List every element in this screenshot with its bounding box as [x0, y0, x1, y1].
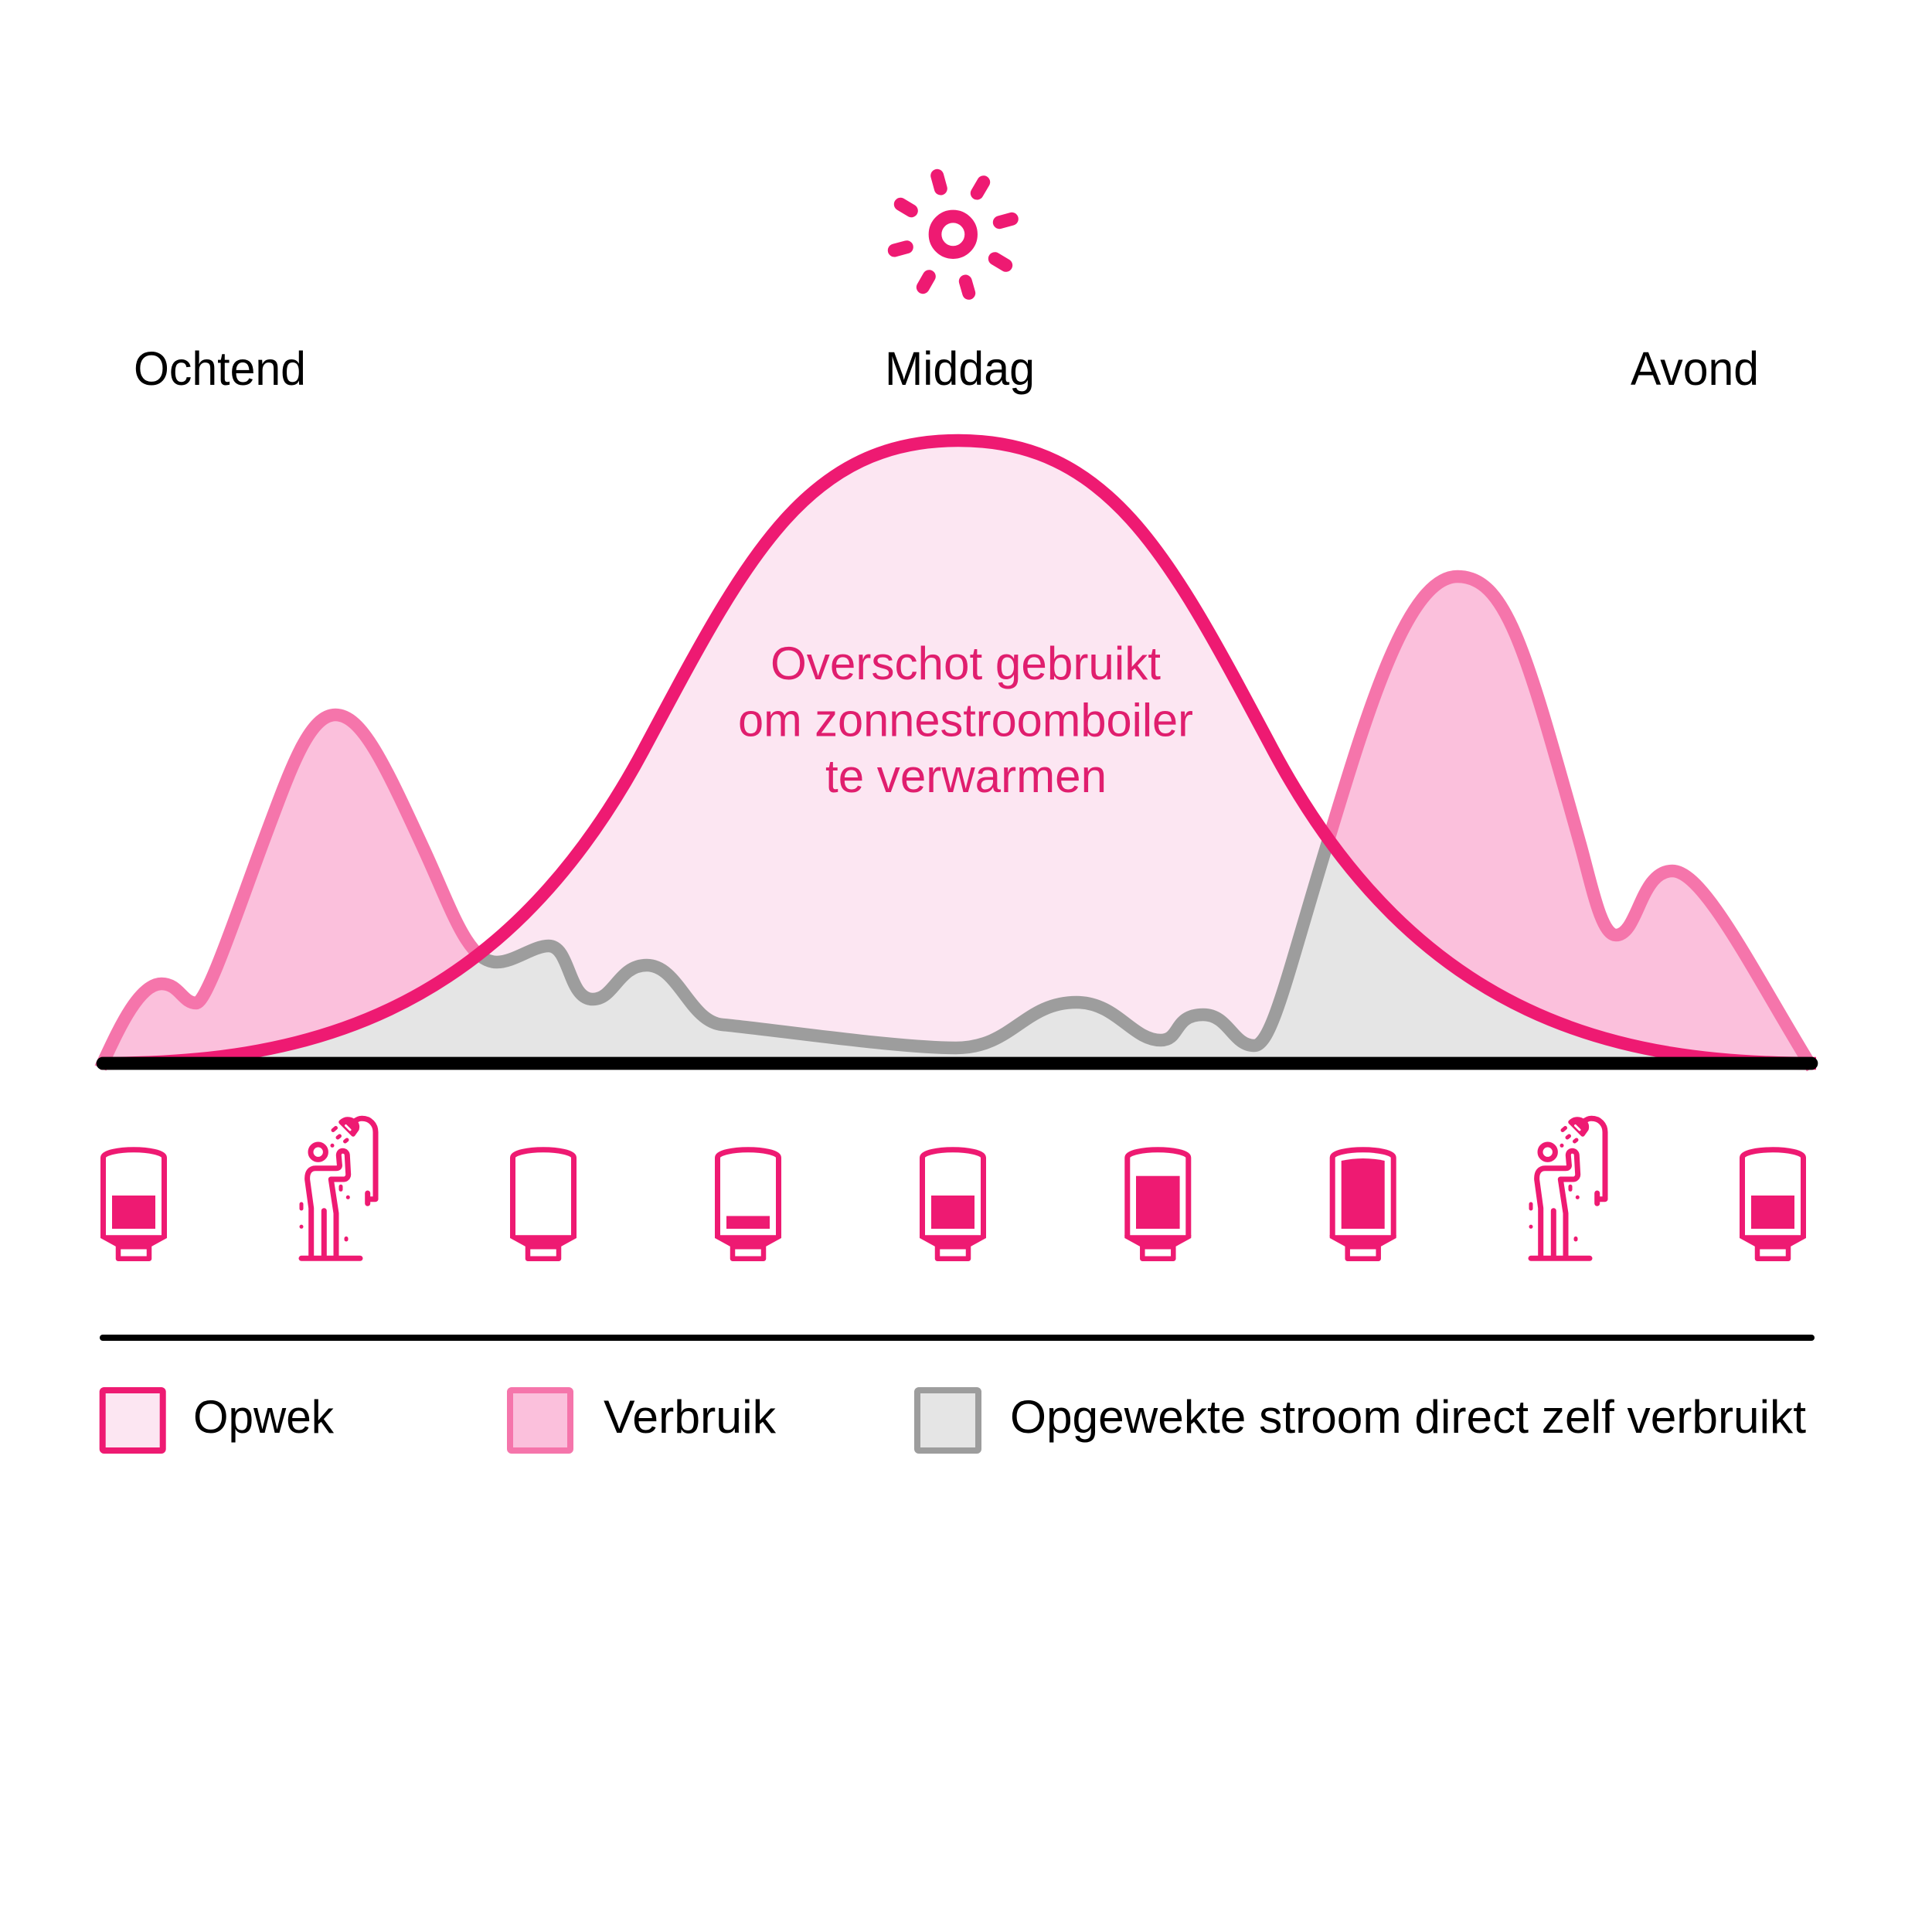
- icon: boiler full: [1330, 1150, 1396, 1259]
- legend item: Verbruik: [510, 1390, 777, 1451]
- icon: boiler mostly full: [1124, 1150, 1191, 1259]
- icon: boiler half full: [1740, 1150, 1806, 1259]
- callout: overschot: Overschot gebruikt: [770, 638, 1161, 689]
- legend item: Opgewekte stroom direct zelf verbruikt: Opgewekte stroom direct zelf verbruikt: [1010, 1391, 1806, 1443]
- callout: overschot: te verwarmen: [825, 750, 1107, 802]
- callout: overschot: [738, 638, 1193, 802]
- label: Ochtend: Ochtend: [134, 342, 306, 395]
- icon: person showering: [1531, 1118, 1605, 1258]
- axis: baseline: [103, 1057, 1811, 1070]
- icon: boiler half full: [100, 1150, 167, 1259]
- area and line: opgewekte stroom direct zelf verbruikt: [261, 841, 1655, 1057]
- icon: boiler low: [715, 1150, 781, 1259]
- icon: sun: [894, 175, 1012, 293]
- legend item: Opwek: Opwek: [193, 1391, 335, 1443]
- legend item: Opwek: [103, 1390, 335, 1451]
- infographic canvas: [94, 168, 1818, 1454]
- icon: person showering: [301, 1118, 376, 1258]
- label: Middag: Middag: [885, 342, 1035, 395]
- area and line: verbruik: [100, 577, 1812, 1068]
- icon: boiler half full: [920, 1150, 986, 1259]
- label: Avond: Avond: [1631, 342, 1759, 395]
- callout: overschot: om zonnestroomboiler: [738, 694, 1193, 747]
- area: opwek: [100, 440, 1816, 1063]
- line: opwek: [100, 440, 1816, 1063]
- chart: opwek and verbruik over the day: [100, 440, 1816, 1068]
- legend item: Verbruik: Verbruik: [604, 1391, 777, 1443]
- icon: boiler empty: [510, 1150, 577, 1259]
